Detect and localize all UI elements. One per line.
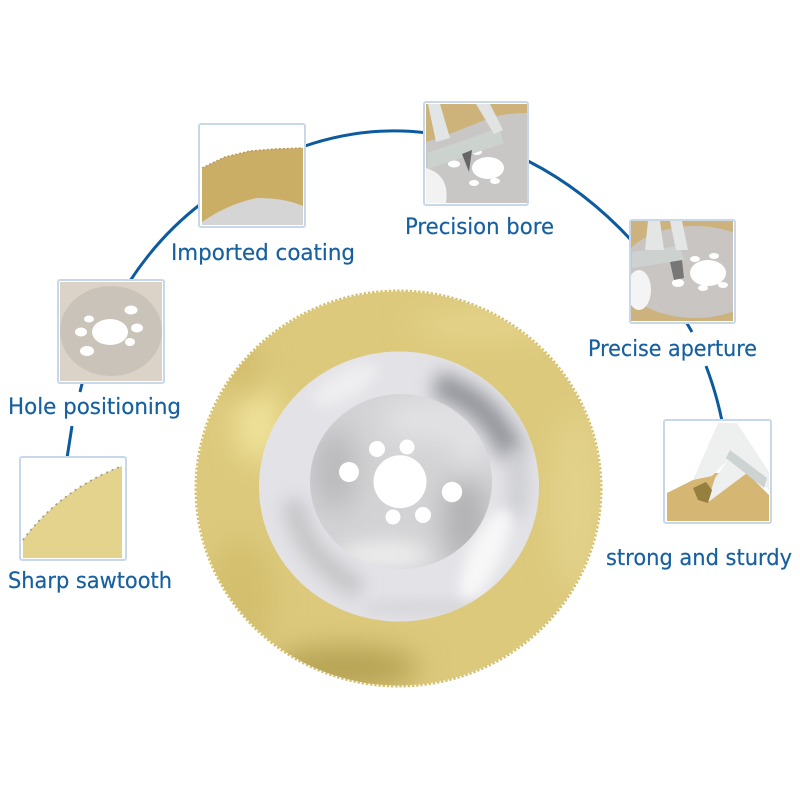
photo: hole positioning: [58, 280, 164, 383]
photo: sharp sawtooth: [20, 457, 126, 560]
label: imported coating: Imported coating: [171, 241, 355, 266]
label: hole positioning: Hole positioning: [8, 395, 181, 420]
label: precision bore: Precision bore: [405, 215, 554, 240]
label: strong and sturdy: strong and sturdy: [606, 546, 792, 571]
connector: imported coating to precision bore: [302, 131, 428, 147]
label: precise aperture: Precise aperture: [588, 337, 757, 362]
photo: precision bore: [424, 102, 528, 205]
gold toothed rim: [196, 291, 601, 690]
saw blade: [196, 291, 601, 690]
centre bore and mounting holes: [339, 440, 462, 524]
connector: precise aperture stub: [685, 320, 692, 332]
photo: precise aperture: [629, 219, 736, 324]
photo: strong and sturdy: [664, 420, 771, 523]
photo: imported coating: [199, 124, 305, 227]
central hub disc: [310, 394, 492, 569]
connector: to strong and sturdy: [706, 366, 722, 421]
silver inner ring: [259, 352, 539, 622]
connector: hole positioning to imported coating: [130, 203, 202, 281]
connector: hole positioning stub: [80, 380, 83, 392]
connector: precision bore to precise aperture: [528, 161, 632, 241]
label: sharp sawtooth: Sharp sawtooth: [8, 569, 172, 594]
connector: hole positioning to sharp sawtooth: [67, 426, 72, 458]
